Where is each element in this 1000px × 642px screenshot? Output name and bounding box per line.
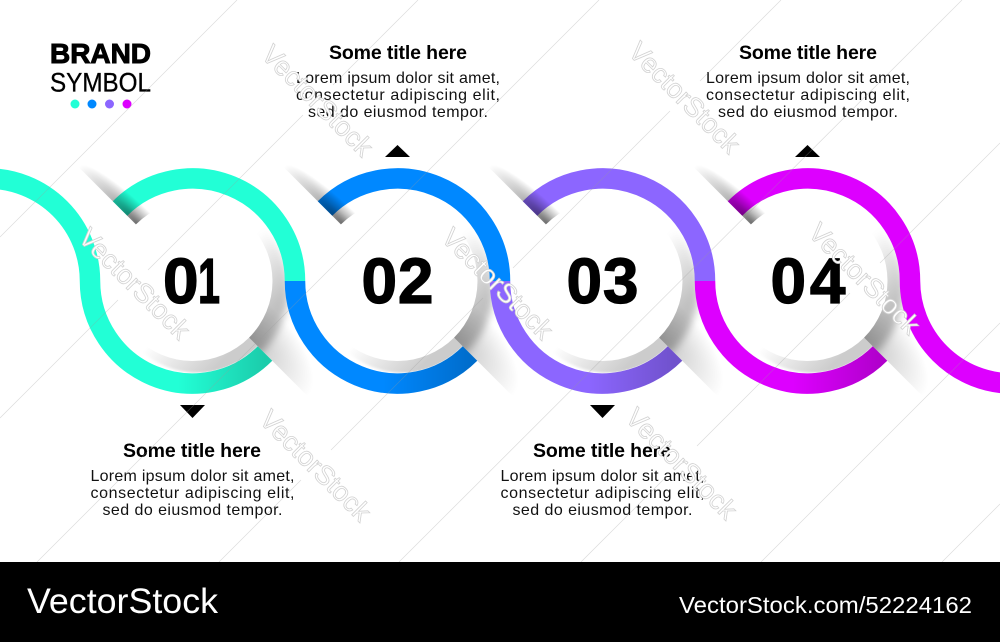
text block 2: Some title here	[329, 42, 467, 64]
fold shadows at top left of circles	[52, 141, 772, 246]
text block 1: sed do eiusmod tempor.	[102, 502, 282, 519]
text block 3: Lorem ipsum dolor sit amet,	[500, 468, 704, 485]
watermark text: VectorStock	[623, 36, 746, 160]
text block 4: Lorem ipsum dolor sit amet,	[706, 70, 910, 87]
number 02: 02	[362, 245, 434, 317]
text block 1	[90, 440, 294, 519]
footer url: VectorStock.com/52224162	[679, 592, 972, 618]
text block 2	[296, 42, 500, 121]
text block 1: consectetur adipiscing elit,	[90, 485, 294, 502]
number 01: 0	[163, 245, 199, 317]
watermark text: VectorStock	[256, 39, 379, 163]
footer bar	[0, 562, 1000, 642]
watermark text: VectorStock	[803, 217, 926, 341]
arrow: up 2	[385, 145, 410, 157]
text block 3: sed do eiusmod tempor.	[512, 502, 692, 519]
ribbon: blue segment	[295, 178, 500, 384]
text block 3: Some title here	[533, 440, 671, 462]
arrow: up 4	[795, 145, 820, 157]
circle 1	[112, 201, 272, 361]
ribbon: purple segment	[500, 178, 705, 384]
footer logo text: VectorStock	[27, 582, 219, 621]
text block 3	[500, 440, 704, 519]
text block 1: Some title here	[123, 440, 261, 462]
arrow: down 3	[590, 405, 615, 418]
logo: brand symbol: BRAND	[50, 38, 151, 69]
text block 2: Lorem ipsum dolor sit amet,	[296, 70, 500, 87]
text block 4: consectetur adipiscing elit,	[706, 87, 910, 104]
text block 2: consectetur adipiscing elit,	[296, 87, 500, 104]
text block 4	[706, 42, 910, 121]
watermark text: VectorStock	[73, 222, 196, 346]
watermark text: VectorStock	[620, 402, 743, 526]
circle 4	[728, 201, 888, 361]
ribbon: magenta segment	[705, 178, 1000, 384]
watermark text	[73, 36, 926, 528]
text block 2: sed do eiusmod tempor.	[308, 104, 488, 121]
ribbon end shading	[172, 354, 880, 383]
text block 1: Lorem ipsum dolor sit amet,	[90, 468, 294, 485]
circle 3	[522, 201, 682, 361]
ribbon: teal segment	[0, 178, 295, 384]
number 01: 1	[198, 247, 220, 317]
logo: brand symbol	[50, 38, 151, 108]
number 04: 04	[770, 245, 846, 317]
panel: white circle backings and cast shadows	[90, 179, 1000, 421]
arrow: down 1	[180, 405, 205, 418]
logo: brand symbol: SYMBOL	[50, 68, 151, 98]
circle 2	[318, 201, 478, 361]
watermark text: VectorStock	[254, 404, 377, 528]
text block 3: consectetur adipiscing elit,	[500, 485, 704, 502]
text block 4: Some title here	[739, 42, 877, 64]
number 03: 03	[566, 245, 638, 317]
number 01	[163, 245, 220, 317]
watermark text: VectorStock	[436, 222, 559, 346]
text block 4: sed do eiusmod tempor.	[718, 104, 898, 121]
